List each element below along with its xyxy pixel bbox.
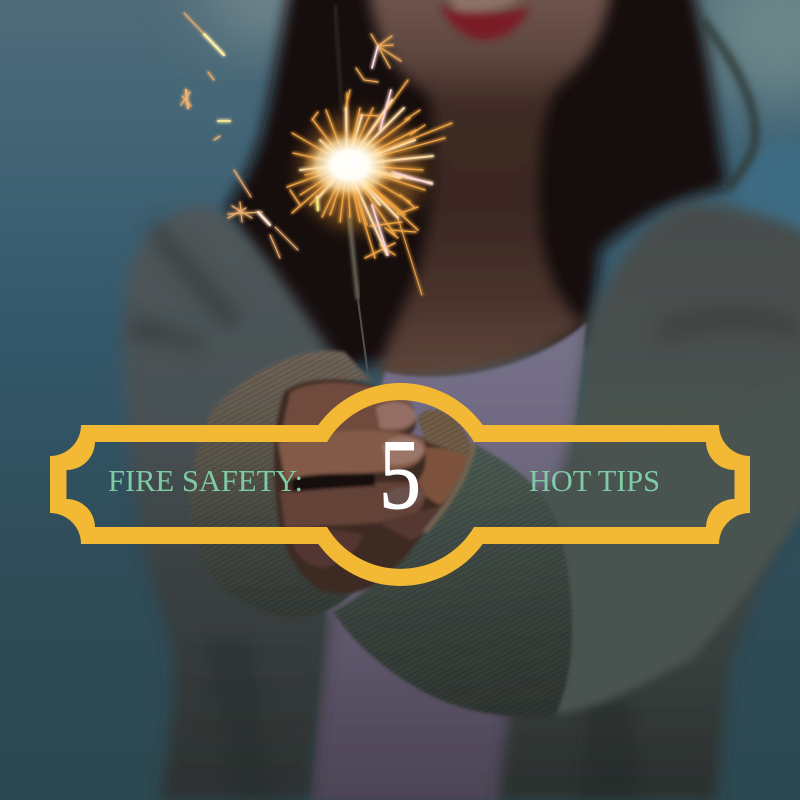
sparkler stick [335,5,369,382]
right arm [470,370,800,714]
cardigan right side [498,204,800,800]
sparkler with sparks [181,5,452,382]
spark burst glow [300,114,424,230]
spark white core [302,129,398,201]
left sleeve cuff [190,351,372,616]
white shirt [310,322,587,800]
heading left: fire safety: FIRE SAFETY: [108,463,303,498]
left floating sparks [181,13,318,258]
spark rays [181,13,452,295]
banner frame [50,383,750,586]
lips [440,0,530,40]
face and chest skin [368,0,612,380]
cardigan left side [123,204,340,800]
right sleeve cuff [333,444,572,716]
number five: 5 [379,419,421,530]
small cuff behind fingers [417,410,472,458]
hands [274,379,473,593]
heading right: hot tips: HOT TIPS [529,463,660,498]
upper small star spark [356,34,401,82]
hair [226,0,755,370]
